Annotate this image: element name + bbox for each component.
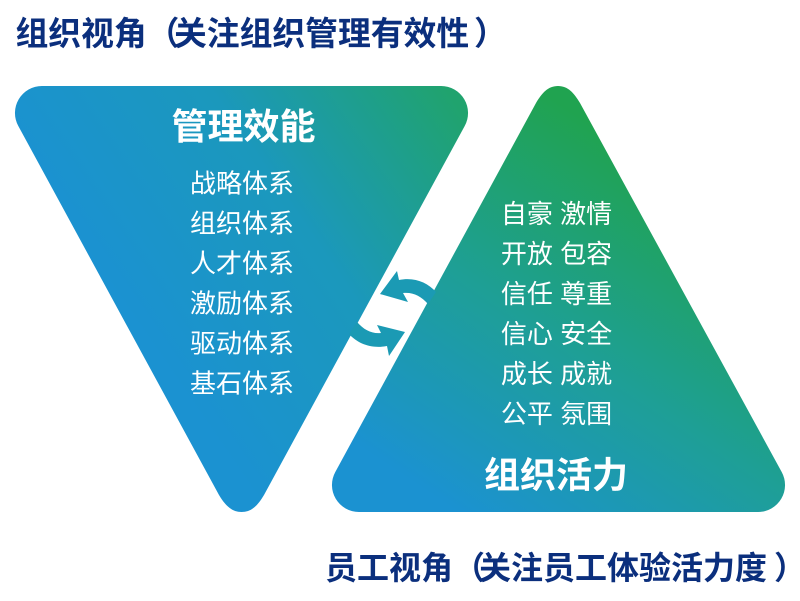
list: vitality qualities: 信心 安全 xyxy=(501,319,612,349)
arrow: lower, pointing right xyxy=(349,322,405,356)
list: management systems: 人才体系 xyxy=(190,248,294,278)
list: vitality qualities: 成长 成就 xyxy=(501,359,612,389)
list: management systems xyxy=(190,168,294,398)
list: management systems: 激励体系 xyxy=(190,288,294,318)
panel title: management effectiveness: 管理效能 xyxy=(171,106,316,147)
icon: circular exchange arrows xyxy=(349,271,436,356)
upright triangle shape xyxy=(332,86,785,512)
heading: employee perspective: 关注员工体验活力度 xyxy=(479,550,767,586)
heading: employee perspective: 员工视角（ xyxy=(325,550,485,586)
panel: management effectiveness inverted triangle xyxy=(15,86,468,512)
heading: organization perspective: 关注组织管理有效性 xyxy=(174,15,469,52)
list: management systems: 战略体系 xyxy=(190,168,294,198)
heading: organization perspective: 组织视角（ xyxy=(16,15,179,52)
list: vitality qualities: 信任 尊重 xyxy=(501,279,612,309)
heading: organization perspective: ） xyxy=(474,15,507,52)
list: vitality qualities xyxy=(501,199,612,429)
arrow: upper, pointing left xyxy=(380,271,436,304)
list: management systems: 组织体系 xyxy=(190,208,294,238)
list: vitality qualities: 开放 包容 xyxy=(501,239,612,269)
list: vitality qualities: 自豪 激情 xyxy=(501,199,612,229)
list: management systems: 驱动体系 xyxy=(190,328,294,358)
panel title: organizational vitality: 组织活力 xyxy=(484,454,628,496)
list: management systems: 基石体系 xyxy=(190,368,294,398)
panel: organizational vitality triangle xyxy=(332,86,785,512)
list: vitality qualities: 公平 氛围 xyxy=(501,399,612,429)
inverted triangle shape xyxy=(15,86,468,512)
